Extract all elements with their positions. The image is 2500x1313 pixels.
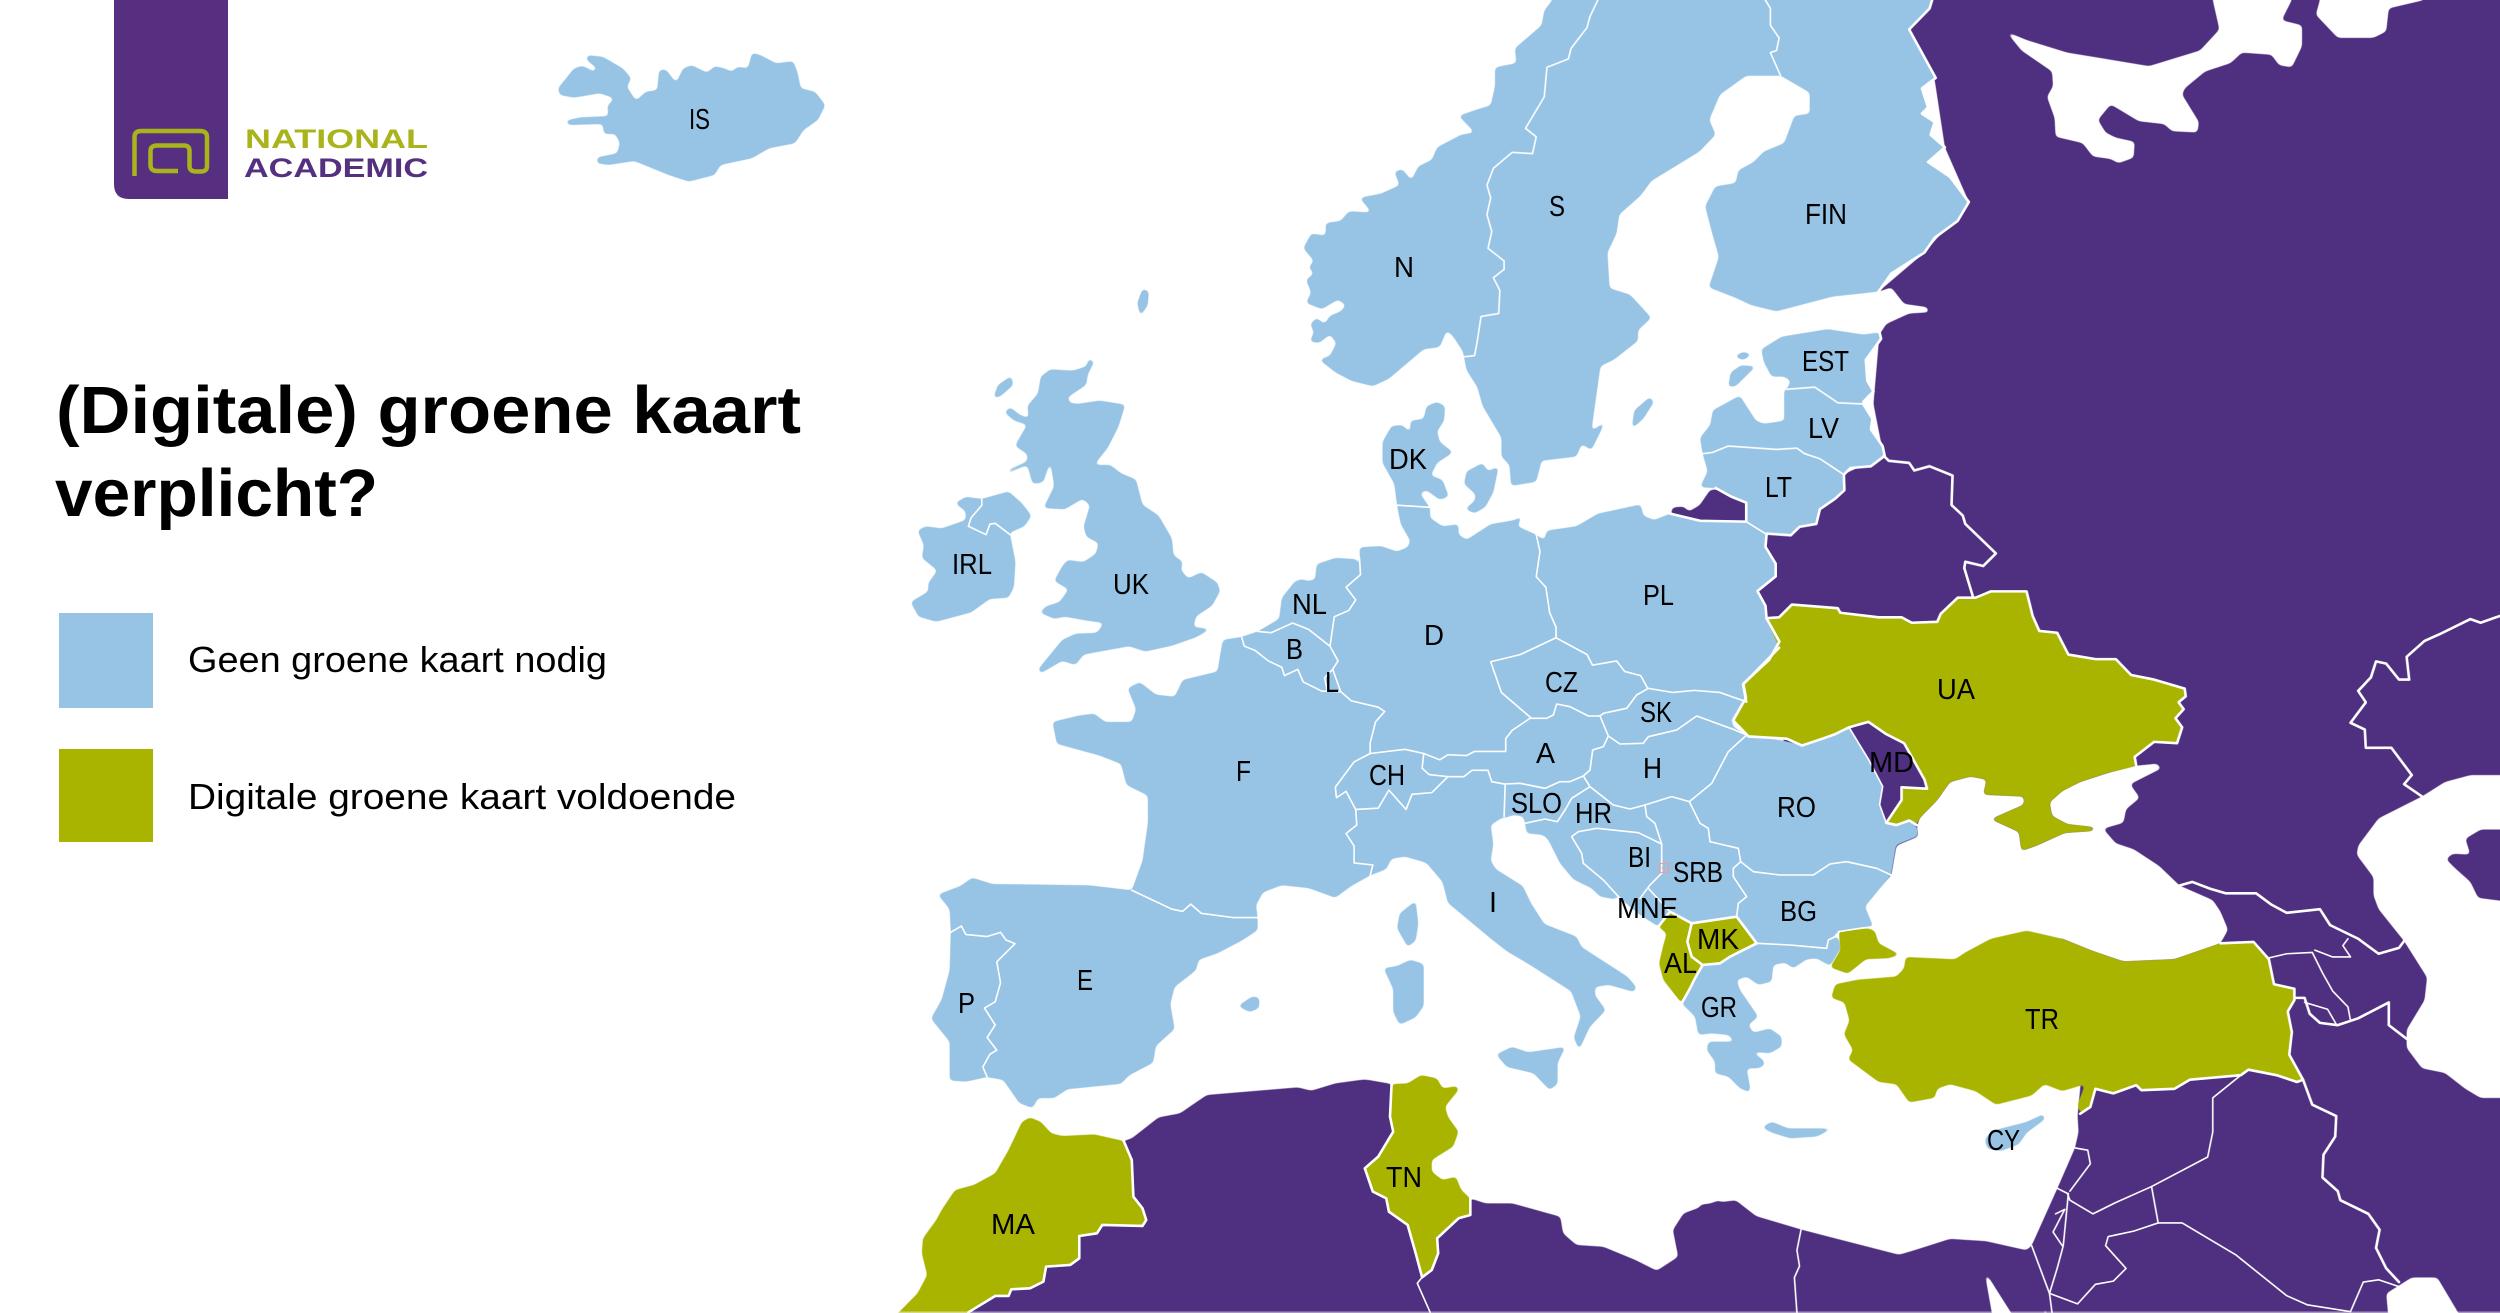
label: I: I xyxy=(1489,887,1497,919)
legend xyxy=(59,613,736,842)
country: Spain xyxy=(938,878,1258,1108)
country: Lithuania xyxy=(1700,446,1844,535)
label: N: N xyxy=(1394,252,1414,284)
country: Northern Ireland xyxy=(968,491,1032,535)
central and south-east Europe countries xyxy=(1422,640,1918,1138)
label: AL: AL xyxy=(1664,948,1697,980)
island: Corsica xyxy=(1397,901,1418,947)
country: Montenegro xyxy=(1620,888,1670,927)
Baltic states and Finland xyxy=(1700,0,1969,535)
purple land layer xyxy=(934,0,2500,1313)
label: HR: HR xyxy=(1575,798,1612,830)
logo panel xyxy=(114,0,228,199)
country labels xyxy=(689,104,2059,1241)
island: Gotland xyxy=(1632,397,1654,429)
missing glyph marker xyxy=(1660,864,1668,872)
label: RO: RO xyxy=(1777,792,1816,824)
label: MA: MA xyxy=(991,1209,1036,1241)
country: Sweden xyxy=(1464,0,1781,486)
country: North Macedonia xyxy=(1687,917,1757,965)
country: Bulgaria xyxy=(1733,862,1891,948)
island: Sardinia xyxy=(1384,960,1424,1025)
Barents bay xyxy=(2316,0,2424,38)
country: Iceland xyxy=(558,53,825,182)
purple land: Middle East xyxy=(1700,577,2500,1313)
label: P: P xyxy=(958,988,975,1020)
title xyxy=(55,373,801,531)
label: S: S xyxy=(1549,191,1565,223)
logo wordmark xyxy=(244,124,428,183)
purple land: North Africa xyxy=(934,1079,1720,1313)
legend text: digital green card suffices: Digitale groene kaart voldoende xyxy=(188,776,736,817)
country: Belgium xyxy=(1242,623,1338,691)
label: FIN: FIN xyxy=(1805,199,1847,231)
logo icon xyxy=(134,131,207,176)
country: Portugal xyxy=(931,926,1015,1082)
label: IRL: IRL xyxy=(952,549,992,581)
logo wordmark: NATIONAL xyxy=(245,124,428,154)
label: F: F xyxy=(1236,756,1251,788)
label: PL: PL xyxy=(1643,580,1674,612)
island: Saaremaa xyxy=(1728,365,1756,387)
label: CZ: CZ xyxy=(1545,667,1578,699)
national borders xyxy=(951,0,2500,1313)
bottom edge line xyxy=(0,1312,2500,1313)
island: Faroe xyxy=(1137,289,1149,316)
label: E: E xyxy=(1077,965,1093,997)
Nordic countries xyxy=(993,0,1781,513)
country: Croatia xyxy=(1525,787,1662,900)
country: Serbia xyxy=(1645,797,1747,923)
label: MNE: MNE xyxy=(1617,893,1678,925)
seas in the north-east xyxy=(1853,0,2424,337)
legend swatch: green xyxy=(59,749,153,842)
label: A: A xyxy=(1536,738,1556,770)
label: MD: MD xyxy=(1869,747,1914,779)
country: Romania xyxy=(1689,726,1918,875)
logo: National Academic xyxy=(114,0,428,199)
country: Finland xyxy=(1705,0,1969,311)
country: Ukraine xyxy=(1733,591,2186,851)
country: Greece xyxy=(1682,937,1841,1093)
small purple areas layer xyxy=(1670,490,2500,909)
country: Netherlands xyxy=(1258,558,1361,646)
country: Slovakia xyxy=(1600,688,1747,744)
blue countries layer xyxy=(558,0,2045,1151)
label: L: L xyxy=(1325,667,1339,699)
label: MK: MK xyxy=(1697,924,1740,956)
label: UK: UK xyxy=(1113,569,1150,601)
label: CY: CY xyxy=(1987,1125,2020,1157)
legend swatch: blue xyxy=(59,613,153,708)
Gulf of Finland inlet xyxy=(1853,287,1930,337)
country: Poland xyxy=(1536,504,1779,702)
Caspian Sea xyxy=(2357,775,2500,1098)
country: Estonia xyxy=(1761,329,1881,403)
country: Denmark, Zealand xyxy=(1464,463,1499,513)
Gulf of Suez xyxy=(1985,1273,2032,1313)
country: Czechia xyxy=(1490,640,1648,718)
country: Austria xyxy=(1422,704,1608,788)
White Sea xyxy=(1983,0,2302,163)
label: GR: GR xyxy=(1701,992,1737,1024)
country: Turkey, Anatolia xyxy=(1831,931,2303,1114)
country: Latvia xyxy=(1700,387,1885,475)
country: Turkey, European part xyxy=(1830,928,1900,974)
label: NL: NL xyxy=(1292,589,1327,621)
country: Italy xyxy=(1346,770,1636,1050)
label: SK: SK xyxy=(1640,697,1673,729)
Black Sea and Sea of Azov xyxy=(1866,764,2228,961)
country: France xyxy=(1052,637,1385,918)
country: Ireland xyxy=(911,497,1016,622)
seas in the south-east xyxy=(1866,764,2500,1313)
country: Moldova xyxy=(1849,722,1927,823)
island: Cyprus xyxy=(1985,1114,2045,1151)
country: United Kingdom xyxy=(1004,358,1220,674)
legend text: no green card needed: Geen groene kaart nodig xyxy=(188,639,607,680)
country: Switzerland xyxy=(1335,749,1448,809)
Kazakh peninsula in the Caspian Sea xyxy=(2446,830,2500,909)
label: DK: DK xyxy=(1389,444,1428,476)
label: D: D xyxy=(1424,620,1444,652)
country: Slovenia xyxy=(1504,776,1590,823)
label: SLO: SLO xyxy=(1511,788,1562,820)
island: Lewis xyxy=(993,376,1013,398)
label: EST: EST xyxy=(1802,346,1849,378)
island: Mallorca xyxy=(1238,996,1259,1012)
country: Bosnia and Herzegovina xyxy=(1572,828,1662,898)
title: (Digitale) groene kaart xyxy=(56,373,801,448)
label: TR: TR xyxy=(2025,1004,2059,1036)
label: TN: TN xyxy=(1386,1162,1422,1194)
island: Sicily xyxy=(1496,1047,1566,1090)
island: Hiiumaa xyxy=(1734,352,1752,360)
label: LV: LV xyxy=(1808,413,1840,445)
label: SRB: SRB xyxy=(1673,857,1723,889)
sea layer cut out of the purple land xyxy=(1853,0,2500,1313)
region: Kaliningrad xyxy=(1670,490,1746,522)
label: LT: LT xyxy=(1765,472,1792,504)
green countries layer xyxy=(875,591,2303,1313)
country: Germany xyxy=(1330,505,1556,760)
country: Tunisia xyxy=(1365,1075,1470,1277)
purple land: Russia and neighbours xyxy=(1766,0,2500,660)
logo wordmark: ACADEMIC xyxy=(244,153,428,183)
label: UA: UA xyxy=(1937,674,1976,706)
island: Crete xyxy=(1762,1122,1833,1138)
country: Denmark, Jutland xyxy=(1382,402,1453,508)
label: BG: BG xyxy=(1780,896,1817,928)
country: Norway xyxy=(1303,0,1598,386)
country: Albania xyxy=(1658,912,1703,1003)
label: BI: BI xyxy=(1628,842,1651,874)
label: B: B xyxy=(1286,634,1303,666)
country: Luxembourg xyxy=(1325,669,1341,692)
label: CH: CH xyxy=(1369,760,1405,792)
Gulf of Aqaba xyxy=(2039,1300,2051,1313)
label: IS: IS xyxy=(689,104,710,136)
country: Morocco xyxy=(875,1117,1146,1313)
title: verplicht? xyxy=(55,456,378,531)
country: Hungary xyxy=(1583,716,1747,809)
label: H: H xyxy=(1643,753,1662,785)
western Europe countries xyxy=(911,358,1779,1108)
Persian Gulf xyxy=(2386,1278,2481,1313)
